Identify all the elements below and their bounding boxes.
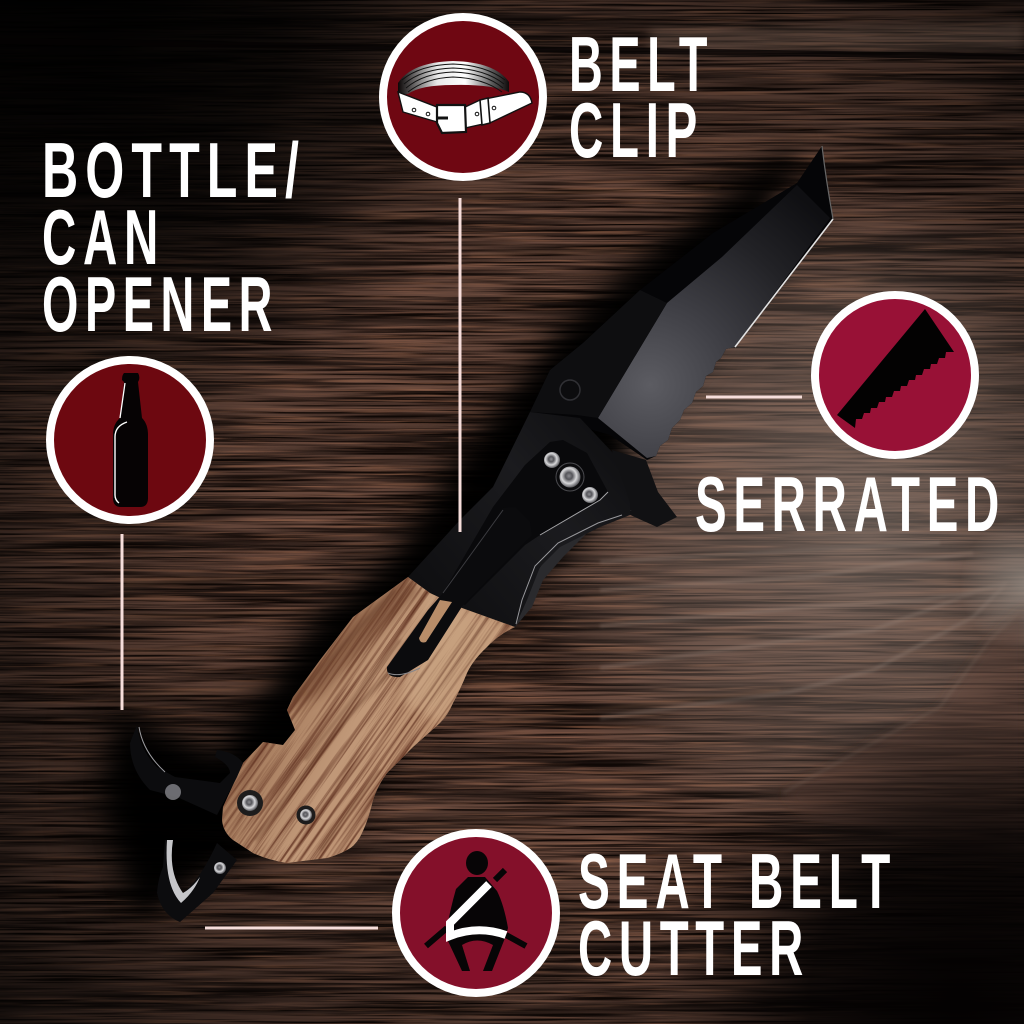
heading: bottle/can opener: CAN — [42, 193, 165, 281]
ricasso tone — [530, 290, 667, 418]
leader line: bottle opener — [120, 534, 124, 710]
pivot pin — [560, 380, 580, 400]
cathedral grain ridges — [600, 543, 1007, 718]
badge: serrated — [815, 295, 975, 455]
handle rivets — [237, 790, 316, 824]
belt clip — [387, 507, 532, 677]
bottle opener hook — [130, 725, 243, 815]
heading: belt clip: BELT — [569, 20, 714, 108]
bolster frame — [408, 412, 630, 627]
heading: bottle/can opener: BOTTLE/ — [42, 126, 306, 214]
wooden handle — [222, 577, 515, 863]
bolster outline highlight — [516, 515, 622, 624]
leader line: belt clip — [458, 198, 462, 532]
badge: seat belt cutter — [396, 833, 556, 993]
heading: belt clip — [569, 20, 714, 174]
heading: bottle/can opener — [42, 126, 306, 348]
plate screws — [544, 452, 598, 503]
icon: seated person with belt — [426, 851, 526, 971]
heading: bottle/can opener: OPENER — [42, 260, 279, 348]
blade — [530, 146, 833, 460]
heading: seat belt cutter: CUTTER — [578, 904, 810, 992]
badge: bottle opener — [50, 360, 210, 520]
blade upper corner edge — [822, 146, 833, 219]
orange wood streaks — [125, 187, 780, 890]
leader line: serrated — [706, 396, 802, 398]
heading: belt clip: CLIP — [569, 86, 704, 174]
inner plate — [443, 440, 608, 605]
knife — [75, 146, 833, 1020]
icon: belt — [398, 61, 532, 133]
icon: saw blade — [837, 309, 954, 428]
badge: belt clip — [383, 17, 543, 177]
cutting edge highlight — [735, 219, 833, 347]
plate edge highlight — [540, 492, 608, 535]
heading: seat belt cutter — [578, 837, 897, 992]
icon: bottle — [113, 373, 148, 507]
finger guard — [612, 450, 677, 527]
leader line: seat belt cutter — [205, 926, 378, 930]
top plank — [650, 22, 1024, 54]
serrated blade inside handle — [515, 510, 632, 627]
knife shadow — [88, 138, 800, 919]
blade lower facet — [598, 185, 830, 458]
seat belt cutter hook — [157, 840, 237, 922]
